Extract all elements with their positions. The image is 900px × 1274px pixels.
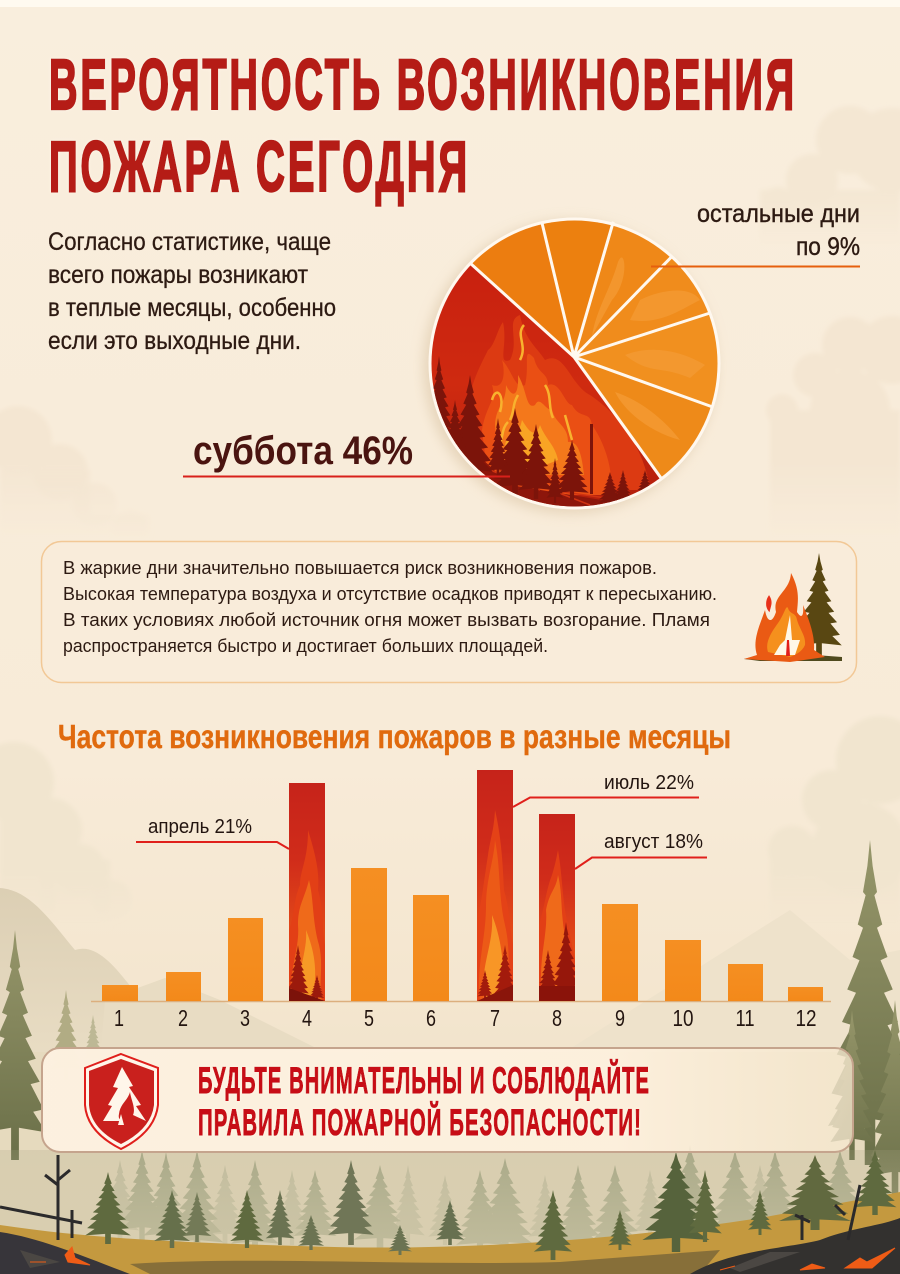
month axis labels: 4 [302,1005,312,1031]
label: August [575,831,707,869]
month axis labels: 12 [796,1005,816,1031]
callout text: В таких условиях любой источник огня может вызвать возгорание. Пламя [63,609,710,630]
title [49,46,797,207]
label: April: апрель 21% [148,816,252,838]
banner text [198,1059,650,1143]
clouds [0,106,900,930]
month axis labels: 11 [736,1005,754,1031]
intro text: если это выходные дни. [48,327,301,355]
label: saturday: суббота 46% [193,429,413,473]
label: other days [651,200,860,266]
misty forest band [0,1052,900,1250]
icon: shield [85,1054,158,1149]
month axis labels: 1 [114,1005,124,1031]
callout panel [42,542,856,682]
month axis labels: 10 [672,1005,694,1031]
foreground trees [85,1150,897,1260]
label: other days: по 9% [796,233,860,261]
burnt stumps [0,1155,860,1240]
intro text: в теплые месяцы, особенно [48,294,336,322]
icon: fire and tree [744,553,842,662]
bar: July [477,770,516,1001]
month axis labels: 2 [178,1005,188,1031]
pie: dividers [470,222,713,479]
label: July: июль 22% [604,772,694,794]
pie: orange sectors [472,220,718,477]
bar: August [539,814,575,1001]
month axis labels [114,1005,816,1031]
charred ground [0,1218,900,1274]
month axis labels: 3 [240,1005,250,1031]
month axis labels: 6 [426,1005,436,1031]
month axis labels: 7 [490,1005,500,1031]
label: July [513,772,699,807]
mid trees [120,1145,869,1265]
title: ПОЖАРА СЕГОДНЯ [49,128,470,207]
ground [0,1192,900,1274]
callout text: В жаркие дни значительно повышается риск возникновения пожаров. [63,557,657,578]
orange bars [102,868,823,1001]
bottom banner [42,1048,853,1152]
intro text: Согласно статистике, чаще [48,228,331,256]
bar chart [91,770,831,1031]
month axis labels: 8 [552,1005,562,1031]
pie chart [420,216,720,518]
label: August: август 18% [604,831,703,853]
label: other days: остальные дни [697,200,860,228]
large side trees [0,840,900,1200]
month axis labels: 9 [615,1005,625,1031]
label: April [136,816,289,849]
bar: April [287,783,325,1001]
hills [0,888,330,1070]
intro text [48,228,336,355]
far trees [101,1160,779,1245]
intro text: всего пожары возникают [48,261,308,289]
callout text [63,557,717,656]
callout text: распространяется быстро и достигает больших площадей. [63,635,548,656]
callout text: Высокая температура воздуха и отсутствие осадков приводят к пересыханию. [63,583,717,604]
pie: red saturday sector [432,266,660,506]
month axis labels: 5 [364,1005,374,1031]
chart heading: Частота возникновения пожаров в разные месяцы [58,718,731,755]
